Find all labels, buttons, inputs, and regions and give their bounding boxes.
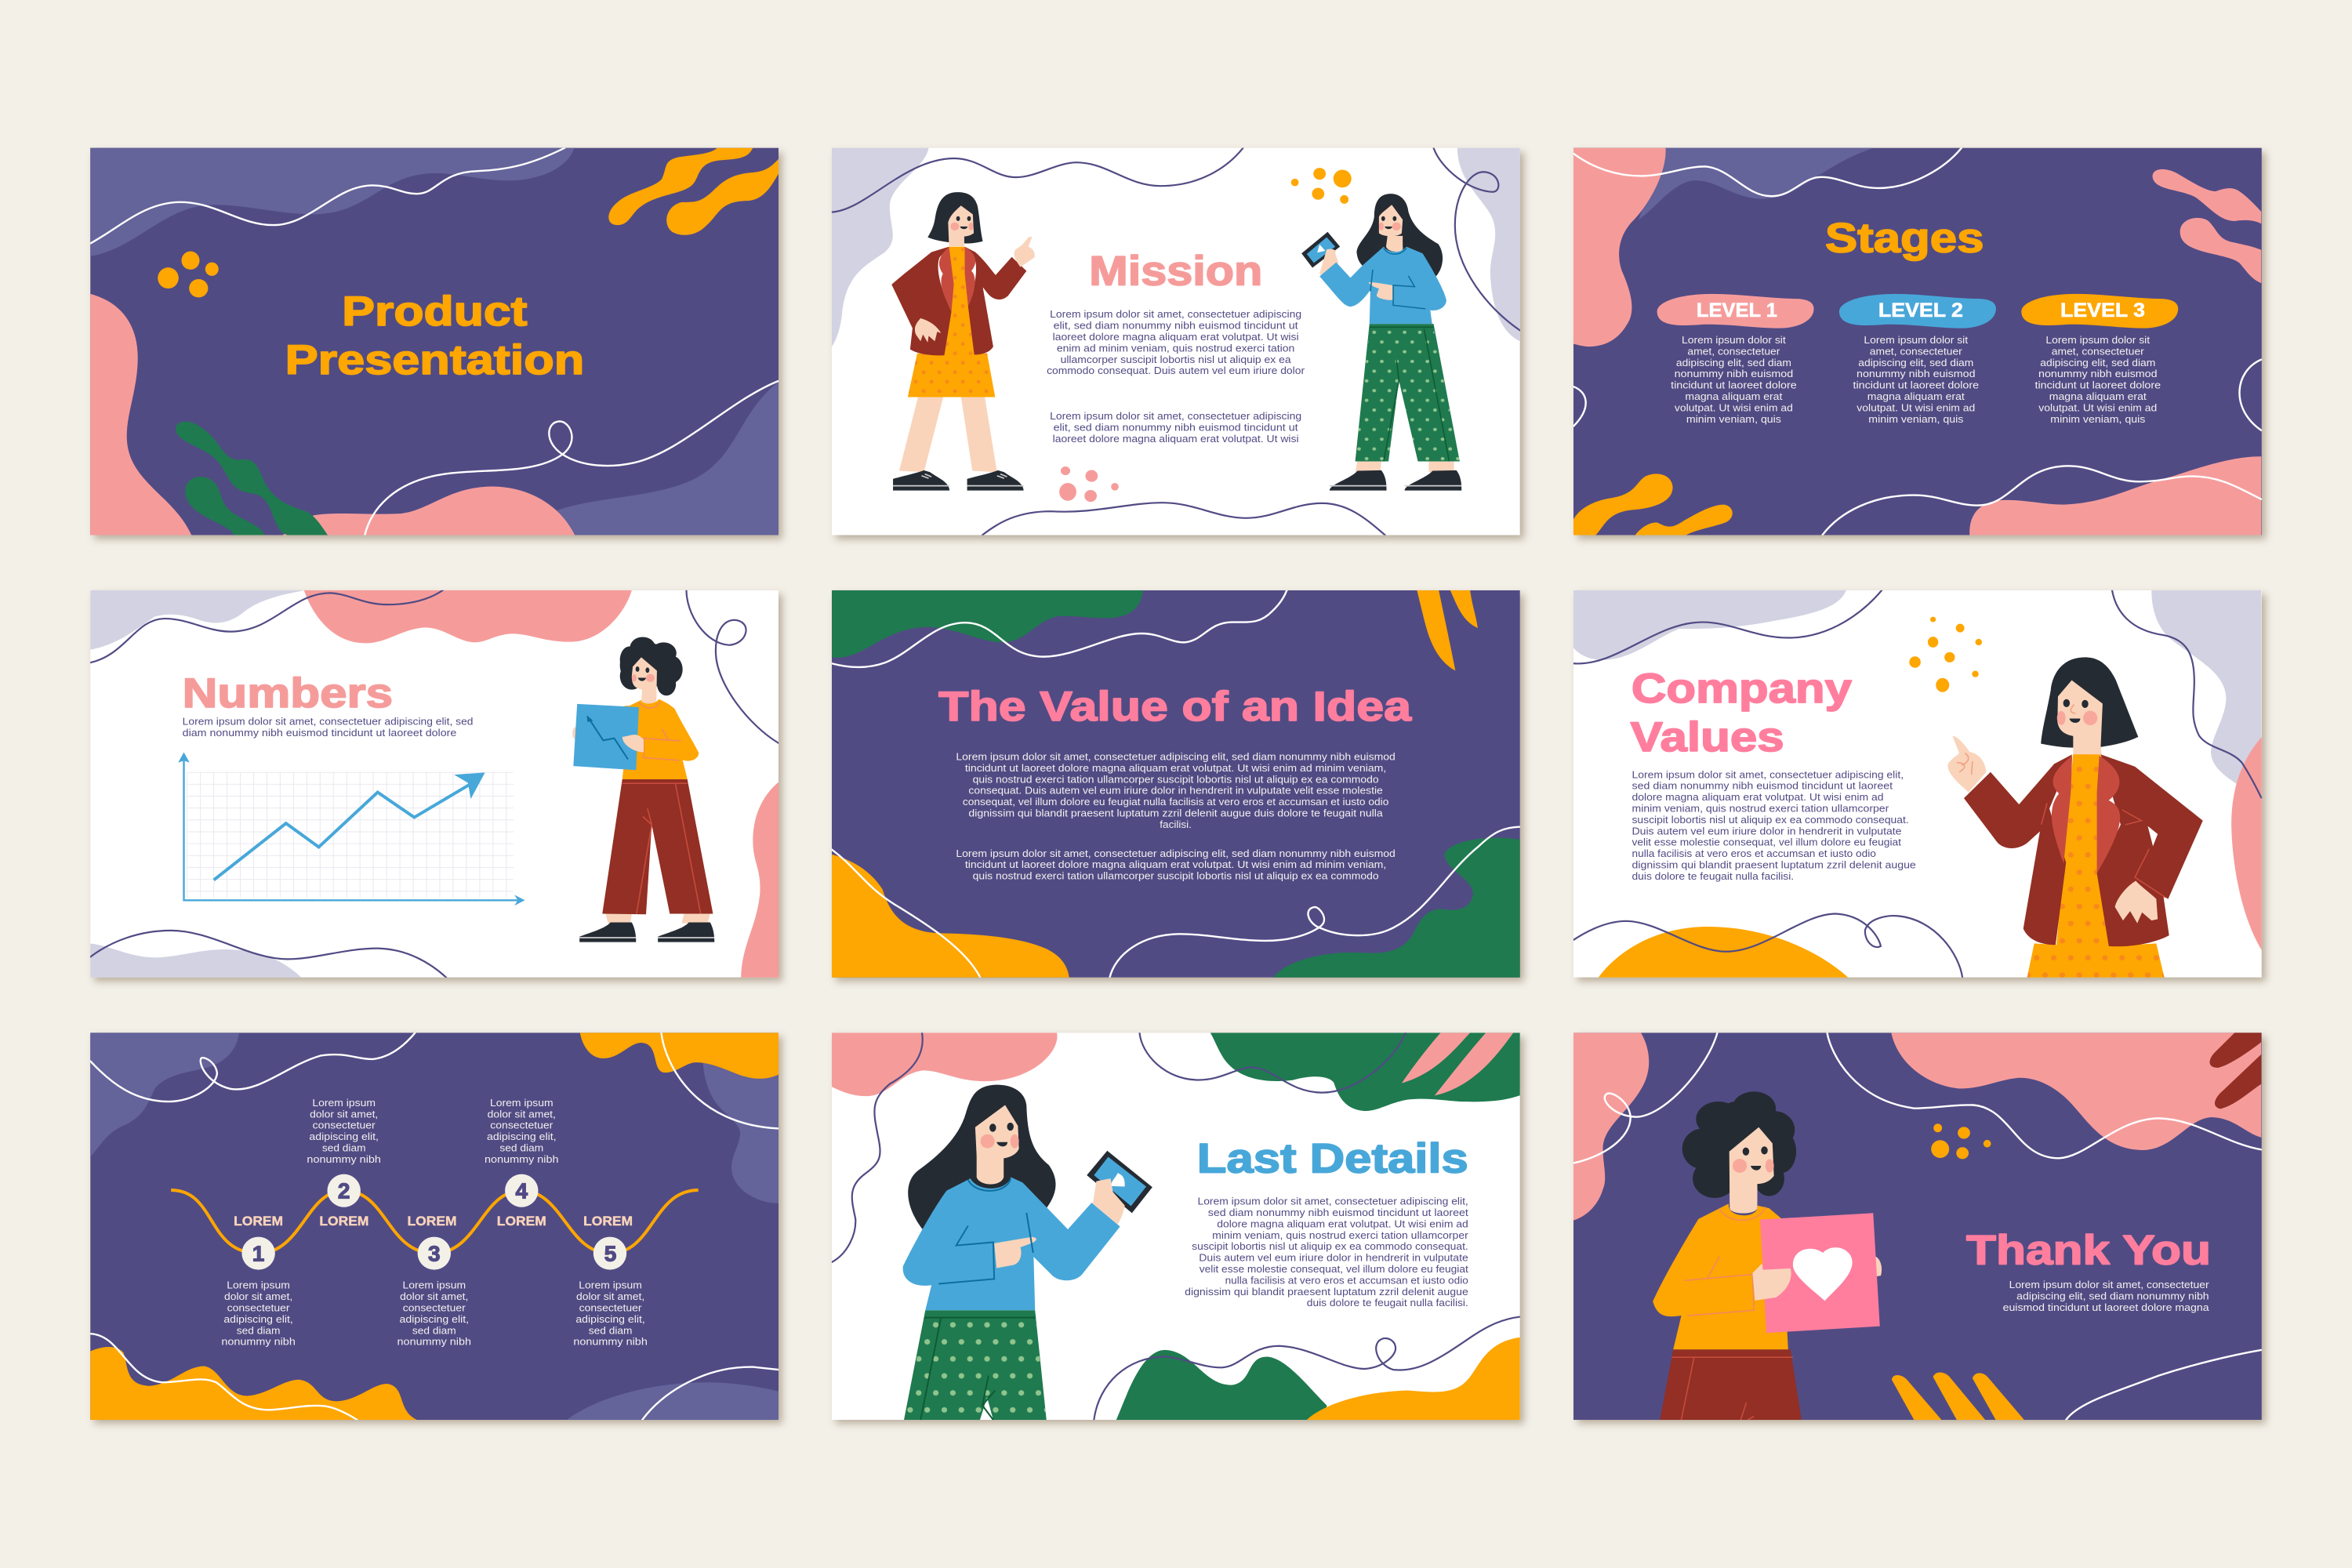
text block: paragraph one: ullamcorper suscipit lobortis nisl ut aliquip ex ea <box>1061 354 1291 365</box>
text block: minim veniam, quis nostrud exerci tation ullamcorper <box>1632 803 1889 814</box>
text block: step 5: adipiscing elit, <box>575 1313 645 1325</box>
figure: woman in blazer and dress <box>891 192 1035 491</box>
title: Company <box>1632 666 1852 712</box>
text block: suscipit lobortis nisl ut aliquip ex ea commodo consequat. <box>1192 1240 1468 1252</box>
text block: level 1: minim veniam, quis <box>1686 413 1781 425</box>
text block: adipiscing elit, sed diam nonummy nibh <box>2016 1290 2209 1301</box>
title: Mission <box>1089 248 1262 295</box>
level labels: LEVEL 2 <box>1878 299 1963 321</box>
text block: step 4 <box>485 1097 559 1165</box>
text block: duis dolore te feugait nulla facilisi. <box>1632 870 1794 882</box>
text block: level 2: nonummy nibh euismod <box>1857 368 1976 379</box>
text block: level 1: Lorem ipsum dolor sit <box>1682 334 1786 346</box>
text block: level 3: minim veniam, quis <box>2050 413 2146 425</box>
title: Numbers <box>183 670 393 717</box>
text block: sed diam nonummy nibh euismod tincidunt ut laoreet <box>1208 1207 1468 1218</box>
title: Presentation <box>285 337 584 383</box>
title: Product <box>342 289 527 335</box>
text block: level 2: tincidunt ut laoreet dolore <box>1853 379 1979 391</box>
text block: minim veniam, quis nostrud exerci tation ullamcorper <box>1212 1229 1469 1241</box>
text block: level 1: amet, consectetuer <box>1687 345 1780 357</box>
text block: level 1: magna aliquam erat <box>1685 390 1783 402</box>
text block: paragraph two <box>956 848 1396 882</box>
step numbers: 1 <box>252 1241 264 1265</box>
title <box>1631 666 1852 760</box>
text block: step 3: nonummy nibh <box>397 1336 471 1348</box>
text block: level 1: tincidunt ut laoreet dolore <box>1671 379 1797 391</box>
text block: step 1 <box>221 1279 296 1348</box>
figure: woman pointing, close-up <box>1947 657 2203 978</box>
text block: step 2: Lorem ipsum <box>312 1097 376 1109</box>
text block: paragraph one: elit, sed diam nonummy nibh euismod tincidunt ut <box>1054 320 1298 332</box>
text block: paragraph two <box>1050 410 1301 445</box>
panel: Mission slide <box>832 148 1524 539</box>
text block: velit esse molestie consequat, vel illum dolore eu feugiat <box>1200 1263 1468 1275</box>
text block: paragraph two: Lorem ipsum dolor sit amet, consectetuer adipiscing elit, sed diam nonummy nibh euismod <box>956 848 1396 859</box>
text block: step 2: consectetuer <box>313 1120 376 1131</box>
text block: step 3: dolor sit amet, <box>400 1290 468 1302</box>
text block: nulla facilisis at vero eros et accumsan et iusto odio <box>1225 1274 1468 1286</box>
step labels <box>234 1214 633 1229</box>
text block: step 1: nonummy nibh <box>221 1336 296 1348</box>
step labels: LOREM <box>408 1214 456 1229</box>
text block: Duis autem vel eum iriure dolor in hendrerit in vulputate <box>1632 825 1902 837</box>
text block: step 2 <box>307 1097 381 1165</box>
text block: step 1: adipiscing elit, <box>223 1313 293 1325</box>
step numbers: 4 <box>516 1178 528 1203</box>
text block: level 2: Lorem ipsum dolor sit <box>1864 334 1969 346</box>
text block: step 1: dolor sit amet, <box>224 1290 292 1302</box>
step labels: LOREM <box>497 1214 546 1229</box>
text block: paragraph one: enim ad minim veniam, quis nostrud exerci tation <box>1057 342 1294 354</box>
text block: step 1: consectetuer <box>227 1301 290 1314</box>
panel: Last Details slide <box>832 1033 1524 1424</box>
text block: level 1 <box>1671 334 1797 425</box>
panel: Company Values slide <box>1573 590 2266 982</box>
text block <box>1185 1196 1469 1308</box>
text block: Lorem ipsum dolor sit amet, consectetuer <box>2009 1279 2209 1290</box>
text block: paragraph one: commodo consequat. Duis autem vel eum iriure dolor <box>1047 365 1305 376</box>
text block: paragraph one: quis nostrud exerci tation ullamcorper suscipit lobortis nisl ut aliquip ex ea commodo <box>973 773 1379 785</box>
text block: step 4: nonummy nibh <box>485 1153 559 1165</box>
text block: Duis autem vel eum iriure dolor in hendrerit in vulputate <box>1199 1252 1468 1264</box>
text block: step 5: sed diam <box>589 1324 632 1336</box>
panel: The Value of an Idea slide <box>832 590 1524 982</box>
title <box>285 289 584 383</box>
figure: woman with tablet, close-up <box>903 1085 1152 1420</box>
text block: level 2: volutpat. Ut wisi enim ad <box>1857 401 1975 413</box>
text block <box>183 715 473 739</box>
text block: step 2: sed diam <box>322 1142 366 1154</box>
step numbers: 3 <box>428 1241 441 1265</box>
level labels: LEVEL 3 <box>2060 299 2145 321</box>
text block: step 4: adipiscing elit, <box>487 1131 557 1142</box>
text block: level 3 <box>2035 334 2161 425</box>
figure: woman with tablet and green trousers <box>1301 194 1461 491</box>
text block: step 3: consectetuer <box>403 1301 466 1314</box>
text block: step 4: sed diam <box>499 1142 543 1154</box>
title: Last Details <box>1197 1136 1468 1182</box>
text block: step 5: nonummy nibh <box>573 1336 648 1348</box>
level labels <box>1697 299 2145 321</box>
text block: paragraph two: quis nostrud exerci tation ullamcorper suscipit lobortis nisl ut aliquip ex ea commodo <box>973 870 1379 882</box>
text block: level 1: adipiscing elit, sed diam <box>1676 357 1791 368</box>
text block: level 3: Lorem ipsum dolor sit <box>2045 334 2151 346</box>
text block: step 5: Lorem ipsum <box>579 1279 642 1291</box>
text block: duis dolore te feugait nulla facilisi. <box>1307 1297 1468 1308</box>
text block: suscipit lobortis nisl ut aliquip ex ea commodo consequat. <box>1632 814 1909 826</box>
text block: dolore magna aliquam erat volutpat. Ut wisi enim ad <box>1632 791 1883 803</box>
panel: timeline slide <box>90 1033 782 1424</box>
text block: paragraph one: dignissim qui blandit praesent luptatum zzril delenit augue duis dolore te feugait nulla <box>968 808 1384 818</box>
text block: dolore magna aliquam erat volutpat. Ut wisi enim ad <box>1217 1218 1468 1229</box>
text block: paragraph two: Lorem ipsum dolor sit amet, consectetuer adipiscing <box>1050 410 1301 422</box>
text block: paragraph one: facilisi. <box>1160 818 1192 830</box>
text block: level 2: adipiscing elit, sed diam <box>1858 357 1973 368</box>
text block: level 2: minim veniam, quis <box>1868 413 1964 425</box>
level labels: LEVEL 1 <box>1697 299 1777 321</box>
text block: paragraph one: laoreet dolore magna aliquam erat volutpat. Ut wisi <box>1053 331 1299 343</box>
text block: paragraph one <box>956 751 1396 830</box>
step labels: LOREM <box>319 1214 368 1229</box>
text block: paragraph two: elit, sed diam nonummy nibh euismod tincidunt ut <box>1054 421 1298 433</box>
text block: paragraph one: consequat. Duis autem vel eum iriure dolor in hendrerit in vulputate velit esse molestie <box>968 785 1383 797</box>
text block: paragraph one <box>1047 308 1305 376</box>
text block: paragraph one: tincidunt ut laoreet dolore magna aliquam erat volutpat. Ut wisi enim ad minim veniam, <box>965 762 1386 774</box>
step numbers <box>252 1178 616 1265</box>
text block: paragraph two: laoreet dolore magna aliquam erat volutpat. Ut wisi <box>1053 433 1299 445</box>
step numbers: 2 <box>338 1178 350 1203</box>
text block: level 2: amet, consectetuer <box>1870 345 1963 357</box>
text block: paragraph two: tincidunt ut laoreet dolore magna aliquam erat volutpat. Ut wisi enim ad minim veniam, <box>965 858 1386 870</box>
panel: Numbers slide <box>90 590 782 982</box>
text block: step 5 <box>573 1279 648 1348</box>
text block: level 1: volutpat. Ut wisi enim ad <box>1675 401 1793 413</box>
wave timeline with markers <box>171 1174 699 1270</box>
figure: woman holding heart card <box>1653 1091 1882 1420</box>
text block: step 5: dolor sit amet, <box>576 1290 644 1302</box>
text block: velit esse molestie consequat, vel illum dolore eu feugiat <box>1632 837 1901 848</box>
text block: level 3: adipiscing elit, sed diam <box>2040 357 2155 368</box>
step labels: LOREM <box>583 1214 633 1229</box>
text block: diam nonummy nibh euismod tincidunt ut laoreet dolore <box>183 727 456 739</box>
title: Stages <box>1825 215 1984 262</box>
text block: Lorem ipsum dolor sit amet, consectetuer adipiscing elit, sed <box>183 715 473 727</box>
text block: dignissim qui blandit praesent luptatum zzril delenit augue <box>1632 859 1916 870</box>
text block: level 3: amet, consectetuer <box>2052 345 2145 357</box>
text block: euismod tincidunt ut laoreet dolore magna <box>2003 1301 2209 1313</box>
text block: dignissim qui blandit praesent luptatum zzril delenit augue <box>1185 1286 1468 1298</box>
text block: step 3: adipiscing elit, <box>400 1313 469 1325</box>
title: Thank You <box>1966 1228 2211 1274</box>
text block: step 1: Lorem ipsum <box>227 1279 290 1291</box>
text block: level 3: magna aliquam erat <box>2049 390 2147 402</box>
text block: Lorem ipsum dolor sit amet, consectetuer adipiscing elit, <box>1198 1196 1468 1207</box>
text block: paragraph one: Lorem ipsum dolor sit amet, consectetuer adipiscing <box>1050 308 1301 320</box>
panel: Product Presentation slide <box>90 148 782 539</box>
text block: step 4: consectetuer <box>490 1120 554 1131</box>
text block: step 3: sed diam <box>412 1324 456 1336</box>
text block: paragraph one: Lorem ipsum dolor sit amet, consectetuer adipiscing elit, sed diam nonummy nibh euismod <box>956 751 1396 762</box>
text block: level 2 <box>1853 334 1979 425</box>
text block: level 1: nonummy nibh euismod <box>1675 368 1793 379</box>
panel: Stages slide <box>1573 148 2266 539</box>
title: The Value of an Idea <box>938 684 1412 730</box>
step numbers: 5 <box>604 1241 616 1265</box>
line chart <box>178 753 525 906</box>
text block: step 2: nonummy nibh <box>307 1153 381 1165</box>
text block: level 3: nonummy nibh euismod <box>2038 368 2158 379</box>
text block: Lorem ipsum dolor sit amet, consectetuer adipiscing elit, <box>1632 768 1904 780</box>
text block: level 3: volutpat. Ut wisi enim ad <box>2038 401 2157 413</box>
text block <box>2003 1279 2209 1313</box>
text block: level 2: magna aliquam erat <box>1867 390 1965 402</box>
text block: step 1: sed diam <box>237 1324 280 1336</box>
text block: step 2: dolor sit amet, <box>310 1108 378 1120</box>
panel: Thank You slide <box>1573 1033 2266 1424</box>
text block: sed diam nonummy nibh euismod tincidunt ut laoreet <box>1632 780 1893 792</box>
text block: step 3: Lorem ipsum <box>403 1279 466 1291</box>
text block: step 4: Lorem ipsum <box>490 1097 554 1109</box>
text block: step 2: adipiscing elit, <box>309 1131 379 1142</box>
figure: woman holding chart <box>572 637 714 942</box>
text block: level 3: tincidunt ut laoreet dolore <box>2035 379 2161 391</box>
step labels: LOREM <box>234 1214 283 1229</box>
text block: step 4: dolor sit amet, <box>488 1108 556 1120</box>
text block: step 5: consectetuer <box>579 1301 642 1314</box>
text block <box>1632 768 1916 882</box>
title: Values <box>1631 714 1784 760</box>
text block: step 3 <box>397 1279 471 1348</box>
text block: paragraph one: consequat, vel illum dolore eu feugiat nulla facilisis at vero eros et accumsan et iusto odio <box>963 796 1388 808</box>
text block: nulla facilisis at vero eros et accumsan et iusto odio <box>1632 848 1876 859</box>
